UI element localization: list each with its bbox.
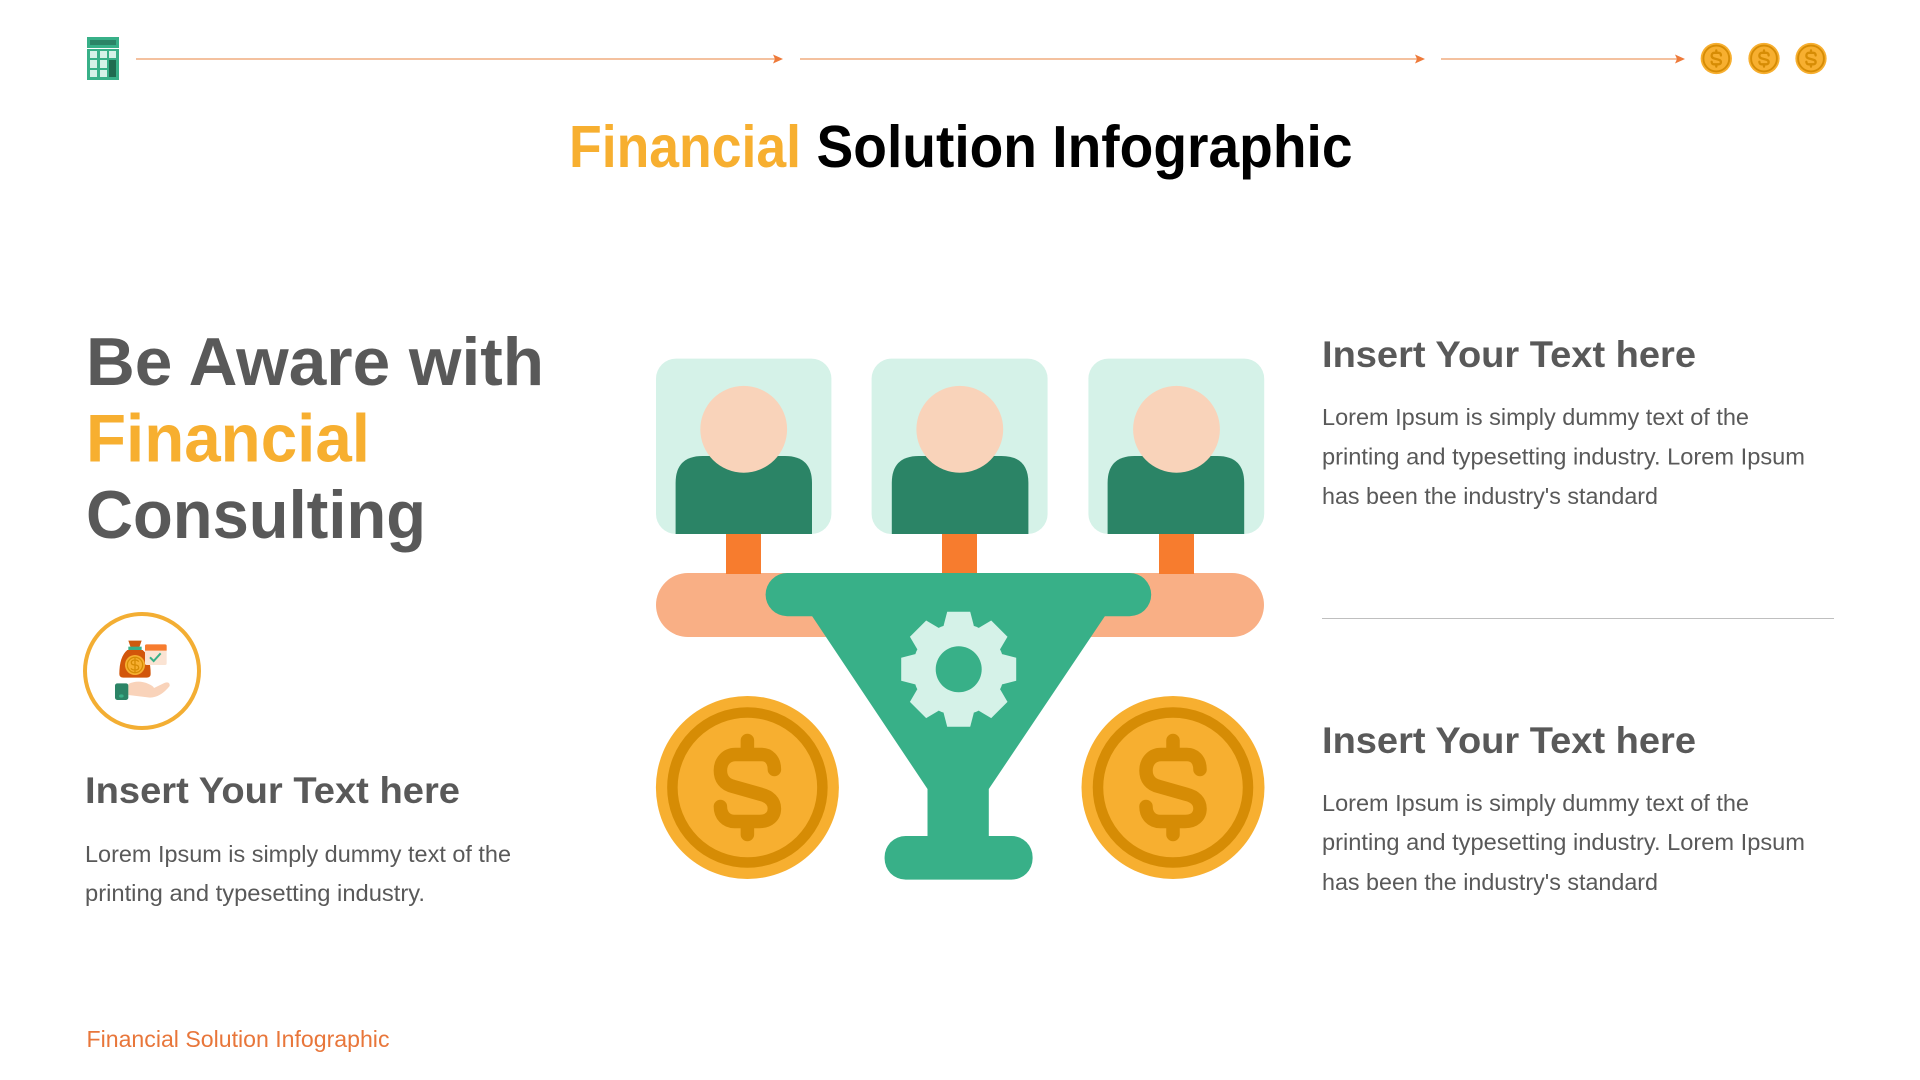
text block: right bottom bbox=[1322, 720, 1805, 895]
text block: left: printing and typesetting industry. bbox=[85, 880, 425, 906]
icon: gear bbox=[901, 612, 1016, 727]
arrow: first segment bbox=[136, 54, 783, 64]
text block: right bottom: Insert Your Text here bbox=[1322, 720, 1696, 761]
text block: right top: Lorem Ipsum is simply dummy text of the bbox=[1322, 404, 1749, 430]
icon: three small coins bbox=[1701, 43, 1827, 74]
icon: money bag and hand in circle bbox=[85, 614, 199, 728]
title bbox=[569, 114, 1352, 180]
text block: right top bbox=[1322, 334, 1805, 509]
conveyor bar bbox=[656, 573, 1264, 637]
heading: Be Aware with Financial Consulting: Be Aware with bbox=[86, 324, 544, 400]
text block: right bottom: Lorem Ipsum is simply dummy text of the bbox=[1322, 790, 1749, 816]
text block: right bottom: has been the industry's standard bbox=[1322, 869, 1658, 895]
title: Solution Infographic bbox=[816, 114, 1352, 180]
text block: right bottom: printing and typesetting industry. Lorem Ipsum bbox=[1322, 829, 1805, 855]
heading: Be Aware with Financial Consulting bbox=[86, 324, 544, 553]
person card 3 bbox=[1088, 359, 1264, 574]
text block: right top: Insert Your Text here bbox=[1322, 334, 1696, 375]
title: Financial bbox=[569, 114, 801, 180]
footer label: Financial Solution Infographic bbox=[86, 1026, 390, 1052]
funnel bbox=[766, 573, 1151, 880]
text block: right top: has been the industry's standard bbox=[1322, 483, 1658, 509]
icon: calculator bbox=[87, 37, 119, 80]
arrow: second segment bbox=[800, 54, 1425, 64]
text block: left: Insert Your Text here bbox=[85, 770, 460, 811]
heading: Be Aware with Financial Consulting: Consulting bbox=[86, 477, 426, 553]
diagram: funnel turning people into money bbox=[656, 359, 1264, 880]
text block: left: Lorem Ipsum is simply dummy text of the bbox=[85, 841, 511, 867]
heading: Be Aware with Financial Consulting: Financial bbox=[86, 400, 370, 476]
arrow: third segment bbox=[1441, 54, 1685, 64]
coin: left bbox=[656, 696, 839, 879]
text block: left bbox=[85, 770, 511, 906]
person card 1 bbox=[656, 359, 831, 574]
text block: right top: printing and typesetting industry. Lorem Ipsum bbox=[1322, 444, 1805, 470]
coin: right bbox=[1082, 696, 1264, 879]
person card 2 bbox=[872, 359, 1048, 574]
